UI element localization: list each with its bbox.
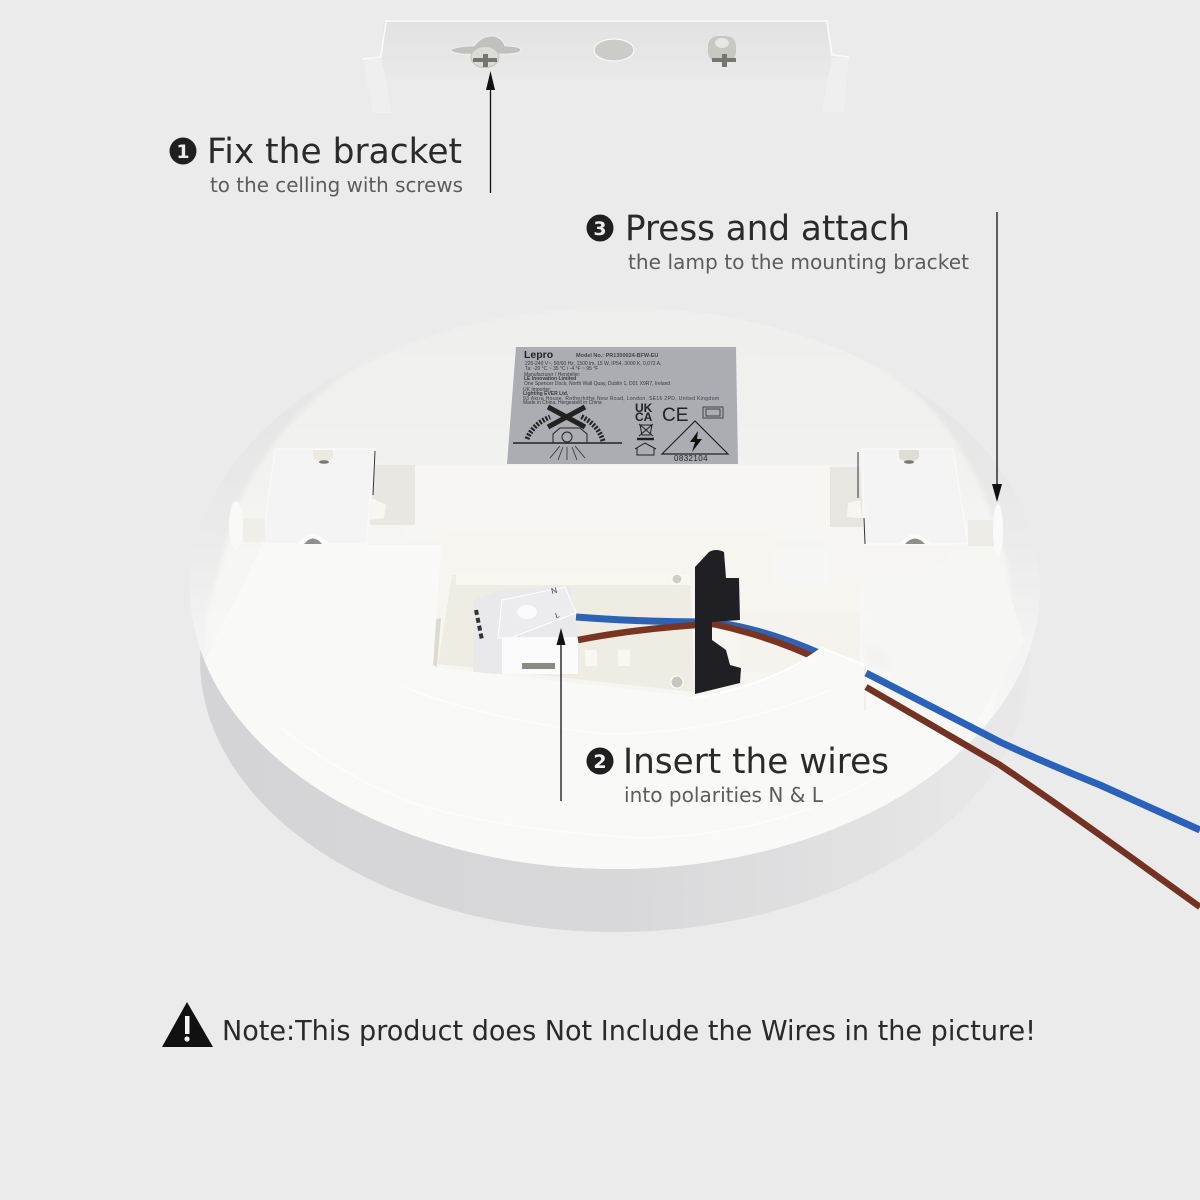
keyhole slot <box>450 36 521 54</box>
centre hole <box>594 39 634 61</box>
brown wire inner <box>578 624 820 660</box>
diffuser <box>200 388 1030 932</box>
arrow: press and attach <box>992 212 1002 502</box>
right screw <box>708 36 736 67</box>
label plate: LE Innovation Limited <box>524 376 576 382</box>
wire connector: L <box>555 612 560 620</box>
outer rim <box>190 307 1040 869</box>
brown wire outer <box>866 687 1200 907</box>
CE mark: CE <box>662 405 688 426</box>
wire connector <box>473 586 578 674</box>
lamp <box>190 307 1200 932</box>
step 2 subtext: into polarities N & L <box>624 783 824 807</box>
label plate: Manufacturer / Hersteller: <box>524 372 580 378</box>
black clamp <box>695 550 741 694</box>
label plate: CA <box>635 410 653 424</box>
arrow: to wire connector <box>556 628 566 801</box>
number badge 2: 2 <box>593 751 607 773</box>
label plate: 220-240 V~, 50/60 Hz, 1500 lm, 15 W, IP54, 3000 K, 0,072 A, <box>525 361 661 367</box>
number badge 3 <box>586 214 614 242</box>
WEEE and house icons <box>635 424 656 455</box>
number badge 1: 1 <box>176 141 190 163</box>
blue wire outer <box>866 673 1200 830</box>
step 1 subtext: to the celling with screws <box>210 173 463 197</box>
blue wire inner <box>576 617 830 658</box>
left clip block <box>262 449 415 544</box>
front rim cover <box>204 619 866 858</box>
step 3 subtext: the lamp to the mounting bracket <box>628 250 969 274</box>
UKCA mark: UK <box>635 401 653 415</box>
notch shadow <box>860 640 890 673</box>
step 1 heading: Fix the bracket <box>207 132 462 172</box>
label plate: Ta: -20 °C ~ 35 °C / -4 °F ~ 95 °F <box>525 366 598 372</box>
terminal compartment <box>430 530 860 697</box>
right clip block <box>830 449 968 544</box>
class II mark <box>703 407 723 418</box>
icon: no-insulation warning <box>513 407 622 460</box>
icon: warning triangle <box>162 1002 213 1047</box>
rim face <box>221 383 1005 580</box>
number badge 1 <box>170 138 196 164</box>
step 2 heading: Insert the wires <box>623 742 889 782</box>
label plate: 0832104 <box>674 454 708 463</box>
number badge 3: 3 <box>593 218 607 240</box>
label plate: UK Importer: <box>523 387 551 393</box>
label plate: One Spencer Dock, North Wall Quay, Dublin 1, D01 X9R7, Ireland <box>524 381 670 387</box>
warning triangle <box>662 421 728 454</box>
arrow: to bracket screw <box>486 71 495 193</box>
label plate: Lepro <box>524 349 553 361</box>
label plate: 93 Akira House, Rotherhithe New Road, London, SE16 2PD, United Kingdom <box>523 396 719 402</box>
label plate: Model No.: PR1300024-BFW-EU <box>576 353 658 359</box>
left pivot <box>229 501 265 549</box>
note <box>162 1002 1036 1047</box>
label plate <box>507 347 738 464</box>
label plate: Made in China, Hergestellt in China <box>523 400 602 406</box>
right pivot <box>968 504 1003 556</box>
left screw <box>471 46 499 68</box>
label plate: Lighting EVER Ltd. <box>523 391 569 397</box>
number badge 2 <box>586 748 614 774</box>
step 3 heading: Press and attach <box>625 209 910 249</box>
mounting bracket <box>362 21 849 113</box>
central spine <box>405 466 835 538</box>
note: Note:This product does Not Include the Wires in the picture! <box>222 1014 1036 1047</box>
wire connector: N <box>550 586 558 596</box>
right rim section <box>858 560 1024 750</box>
